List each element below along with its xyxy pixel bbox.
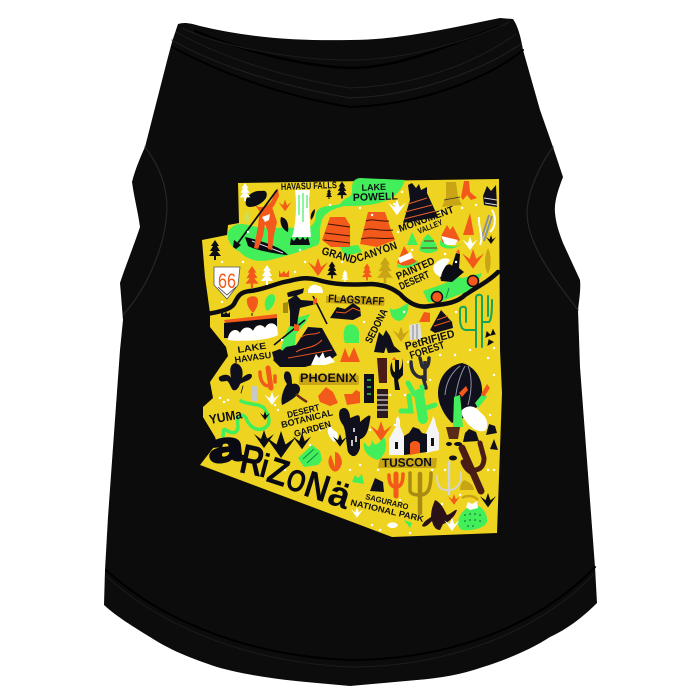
label: Petrified: PetRIFIED [404,328,456,353]
road [207,272,498,314]
icon: mission church [389,416,439,455]
green lake and river [228,178,405,261]
label: Desert (painted): DESERT [397,269,432,293]
title: Arizona: N [299,464,335,511]
icon: light green cactus [401,383,435,419]
icon: southern saguaros [389,443,484,513]
icon: balloons and bridge [221,294,278,341]
title: Arizona: i [256,447,273,486]
icon: Route 66 sign [214,267,240,299]
icon: waterfall [290,190,311,245]
label: Phoenix: PHOENIX [300,371,357,385]
title: Arizona: Z [262,450,294,496]
label: Canyon: CANYON [355,240,399,265]
label: Saguraro: SAGURARO [365,492,409,512]
icon: cacti central west [219,363,370,456]
label: Valley: VALLEY [416,218,444,236]
icon: stones south east [446,424,498,460]
icon: barrel cactus and orange cactus [298,445,342,472]
title: Arizona: a [206,421,247,472]
state silhouette [200,179,502,537]
label: Desert Botanical: DESERT [286,402,321,420]
label: Tuscon: TUSCON [382,455,432,470]
icon: Grand Canyon rocks [322,212,395,247]
label: Grand: GRAND [320,245,358,267]
icon: Route 66 sign: 66 [218,270,236,293]
icon: green snake [223,386,269,436]
icon: small plants near Tuscon [352,421,437,492]
label: Sedona: SEDONA [363,307,391,345]
label: Flagstaff: FLAGSTAFF [328,293,385,308]
icon: Monument Valley buttes [388,181,497,274]
label: Lake Havasu: LAKE [237,341,267,355]
map of Arizona [200,178,502,537]
label: Forest: FOREST [408,339,447,362]
label: Yuma: YUMa [208,406,244,427]
collar ribbing [106,22,595,667]
icon: mesas and Sedona rocks [330,303,495,362]
label: Painted: PAINTED [394,255,437,283]
title: Arizona: O [282,461,311,501]
label: Havasu Falls: HAVASU FALLS [281,180,337,193]
label: Lake Powell: LAKE [361,182,386,193]
icon: central cacti and bars [364,357,429,418]
icon: black desert plants [254,411,347,458]
icon: vintage car with driver [423,249,482,302]
label: Garden: GARDEN [293,419,332,439]
icon: green saguaro [460,295,492,347]
title: Arizona: ä [324,472,357,517]
label: Monument: MONUMENT [397,205,456,235]
label: Lake Powell: POWELL [353,190,399,204]
icon: dark cactus and green barrel [351,480,496,531]
title: Arizona: R [236,435,268,486]
green river under canyon [340,245,362,256]
label: National Park: NATIONAL PARK [350,497,426,524]
label: Botanical: BOTANICAL [280,407,334,430]
icon: plants and trees north west [209,182,393,288]
decorative sprinkles [220,192,494,533]
tank top garment [104,18,597,686]
icon: giant cactus hot-air balloon [438,363,490,439]
icon: Flagstaff band, hiker and mountain [272,285,385,367]
title: Arizona [206,421,357,517]
label: Havasu: HAVASU [234,350,272,365]
icon: paddleboarder [233,188,288,255]
